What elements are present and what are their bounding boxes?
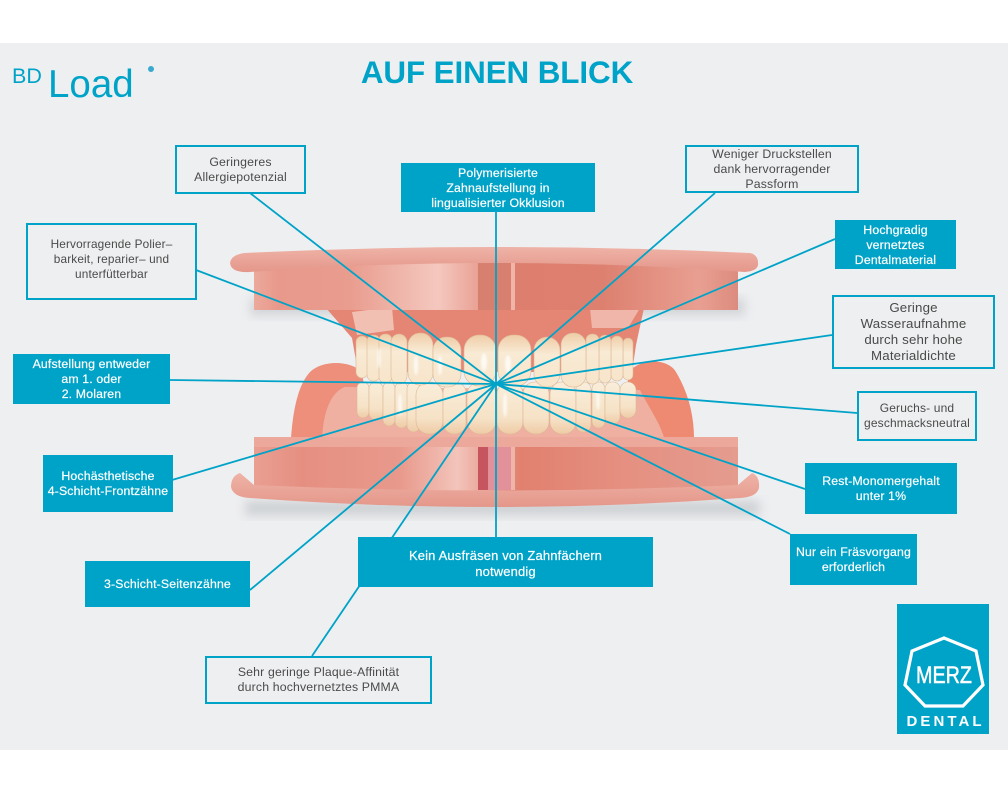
callout: Geringe Wasseraufnahme: durch sehr hohe bbox=[864, 332, 963, 347]
callout: Hochgradig vernetztes Dentalmaterial: Dentalmaterial bbox=[855, 252, 936, 266]
callout: Aufstellung entweder: 2. Molaren bbox=[62, 386, 121, 400]
lower flange bbox=[231, 473, 759, 507]
lower plate box bbox=[254, 437, 738, 493]
callout: Rest-Monomergehalt bbox=[805, 463, 957, 514]
brand logo: Merz Dental: DENTAL bbox=[906, 713, 982, 730]
callout: Geringe Wasseraufnahme: Geringe bbox=[889, 300, 938, 315]
brand logo: BD Load: BD bbox=[12, 64, 42, 88]
lower side blobs bbox=[291, 363, 372, 438]
callout: Hervorragende Polierbarkeit: barkeit, reparier– und bbox=[54, 252, 169, 266]
callout: Geruchs- und geschmacksneutral: geschmacksneutral bbox=[864, 416, 970, 430]
callout: Hochgradig vernetztes Dentalmaterial bbox=[835, 220, 956, 269]
brand logo: BD Load bbox=[12, 63, 154, 106]
tooth highlights bbox=[377, 348, 600, 417]
callout: Geringe Wasseraufnahme: Materialdichte bbox=[871, 348, 956, 363]
upper teeth bbox=[356, 333, 633, 387]
callout: Sehr geringe Plaque-Affinität bbox=[205, 656, 432, 704]
brand logo: Merz Dental: MERZ bbox=[916, 662, 972, 689]
callout: Hochgradig vernetztes Dentalmaterial: Hochgradig bbox=[863, 222, 928, 236]
callout: Weniger Druckstellen: dank hervorragender bbox=[713, 162, 830, 176]
callout: Geringeres Allergiepotenzial: Allergiepotenzial bbox=[194, 170, 287, 184]
callout: Geruchs- und geschmacksneutral: Geruchs- und bbox=[880, 401, 954, 415]
callout: Polymerisierte Zahnaufstellung: lingualisierter Okklusion bbox=[431, 196, 565, 210]
callout: Geruchs- und geschmacksneutral bbox=[857, 391, 977, 441]
brand logo: BD Load: Load bbox=[48, 63, 134, 106]
lower teeth bbox=[357, 382, 636, 434]
callout: Geringeres Allergiepotenzial: Geringeres bbox=[209, 154, 272, 168]
callout: 3-Schicht-Seitenzähne bbox=[85, 561, 250, 607]
callout: Hervorragende Polierbarkeit bbox=[26, 223, 197, 300]
callout: Kein Ausfräsen: notwendig bbox=[475, 564, 536, 579]
callout: Rest-Monomergehalt: unter 1% bbox=[856, 488, 906, 502]
callout: Weniger Druckstellen: Weniger Druckstellen bbox=[712, 147, 832, 161]
callout: Aufstellung entweder bbox=[13, 354, 170, 404]
callout: Sehr geringe Plaque-Affinität: durch hochvernetztes PMMA bbox=[238, 680, 399, 694]
callout: Polymerisierte Zahnaufstellung: Zahnaufstellung in bbox=[446, 181, 550, 195]
callout: 3-Schicht-Seitenzähne: 3-Schicht-Seitenzähne bbox=[104, 576, 231, 590]
upper plate box bbox=[254, 260, 738, 310]
title: AUF EINEN BLICK bbox=[361, 55, 633, 90]
callout: Kein Ausfräsen bbox=[358, 537, 653, 587]
callout: Polymerisierte Zahnaufstellung bbox=[401, 163, 595, 212]
callout: Weniger Druckstellen bbox=[685, 145, 859, 193]
callout: Kein Ausfräsen: Kein Ausfräsen von Zahnfächern bbox=[409, 548, 602, 562]
callout: Nur ein Fräsvorgang: erforderlich bbox=[822, 560, 885, 574]
callout: Nur ein Fräsvorgang bbox=[790, 534, 917, 585]
lower clear gum bbox=[322, 387, 666, 445]
callout: Hochgradig vernetztes Dentalmaterial: vernetztes bbox=[866, 238, 925, 252]
callout: Rest-Monomergehalt: Rest-Monomergehalt bbox=[822, 474, 940, 488]
callout: Hervorragende Polierbarkeit: Hervorragende Polier– bbox=[51, 236, 172, 250]
callout: Geringeres Allergiepotenzial bbox=[175, 145, 306, 194]
callout: Geringe Wasseraufnahme bbox=[832, 295, 995, 369]
upper flange bbox=[230, 247, 758, 272]
callout: Hochästhetische Frontzähne bbox=[43, 455, 173, 512]
callout: Aufstellung entweder: am 1. oder bbox=[61, 372, 122, 386]
callout: Weniger Druckstellen: Passform bbox=[745, 177, 799, 191]
callout: Geringe Wasseraufnahme: Wasseraufnahme bbox=[861, 316, 966, 331]
upper gum bbox=[326, 308, 644, 372]
callout: Polymerisierte Zahnaufstellung: Polymerisierte bbox=[458, 166, 538, 180]
soft shadows bbox=[250, 298, 745, 316]
callout: Nur ein Fräsvorgang: Nur ein Fräsvorgang bbox=[796, 544, 911, 558]
callout: Aufstellung entweder: Aufstellung entweder bbox=[33, 356, 150, 370]
callout: Hochästhetische Frontzähne: Hochästhetische bbox=[61, 468, 155, 482]
callout: Hochästhetische Frontzähne: 4-Schicht-Frontzähne bbox=[48, 484, 168, 498]
callout: Sehr geringe Plaque-Affinität: Sehr geringe Plaque-Affinität bbox=[238, 665, 399, 679]
callout: Hervorragende Polierbarkeit: unterfütterbar bbox=[75, 266, 148, 280]
